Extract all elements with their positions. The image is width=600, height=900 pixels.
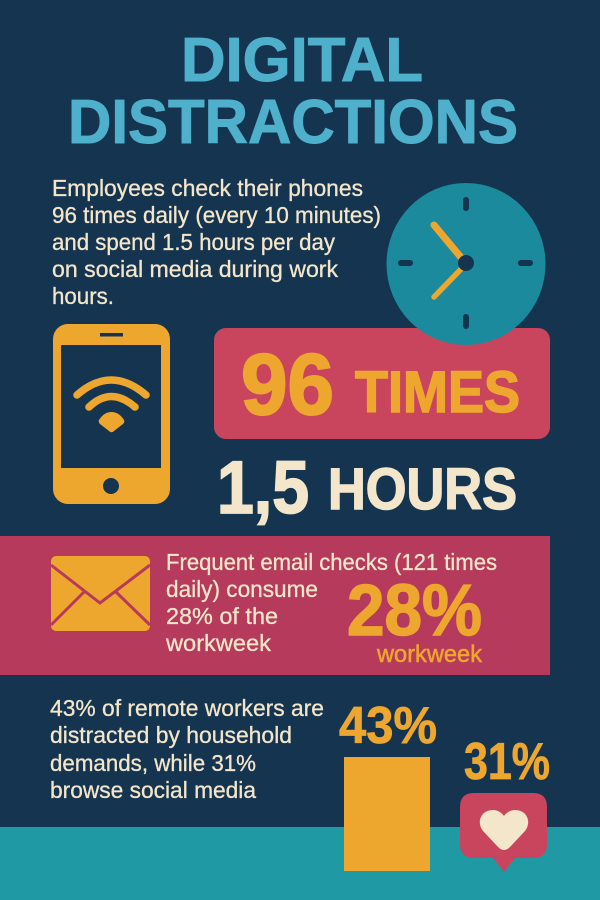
stat: 43%: 43% [339, 697, 437, 755]
panel: email [0, 536, 550, 675]
stat: 31%: 31% [464, 733, 550, 791]
icon: smartphone with wifi [53, 324, 170, 504]
stat: 1,5 hours: 1,5 [217, 446, 309, 529]
stat: 28% workweek: 28% [347, 571, 482, 651]
title: DISTRACTIONS [68, 88, 518, 157]
intro text block: on social media during work [52, 256, 338, 282]
intro text block: hours. [52, 283, 114, 309]
email text: workweek [165, 630, 272, 656]
icon: clock [386, 183, 546, 345]
stat panel: 96 times: 96 [241, 337, 334, 433]
remote workers text [50, 695, 324, 803]
title: DIGITAL [181, 26, 423, 95]
stat panel: 96 times: TIMES [355, 360, 520, 425]
stat: 28% workweek: workweek [376, 641, 483, 668]
intro text block: Employees check their phones [52, 175, 363, 201]
email text: daily) consume [166, 576, 318, 602]
email text: 28% of the [166, 603, 278, 629]
remote workers text: distracted by household [50, 722, 292, 748]
stat panel: 96 times [214, 328, 550, 439]
stat: 1,5 hours: HOURS [328, 457, 517, 522]
stat: 1,5 hours [217, 446, 517, 529]
icon: heart speech bubble [460, 793, 547, 872]
icon: envelope [51, 556, 150, 631]
title [68, 26, 518, 157]
bar chart: 43% bar [344, 757, 430, 871]
intro text block: 96 times daily (every 10 minutes) [52, 202, 381, 228]
remote workers text: browse social media [50, 777, 256, 803]
email text: Frequent email checks (121 times [166, 549, 497, 575]
teal footer band [0, 827, 600, 900]
remote workers text: demands, while 31% [50, 750, 256, 776]
intro text block: and spend 1.5 hours per day [52, 229, 335, 255]
email text [165, 549, 497, 656]
remote workers text: 43% of remote workers are [50, 695, 324, 721]
intro text block [52, 175, 381, 309]
